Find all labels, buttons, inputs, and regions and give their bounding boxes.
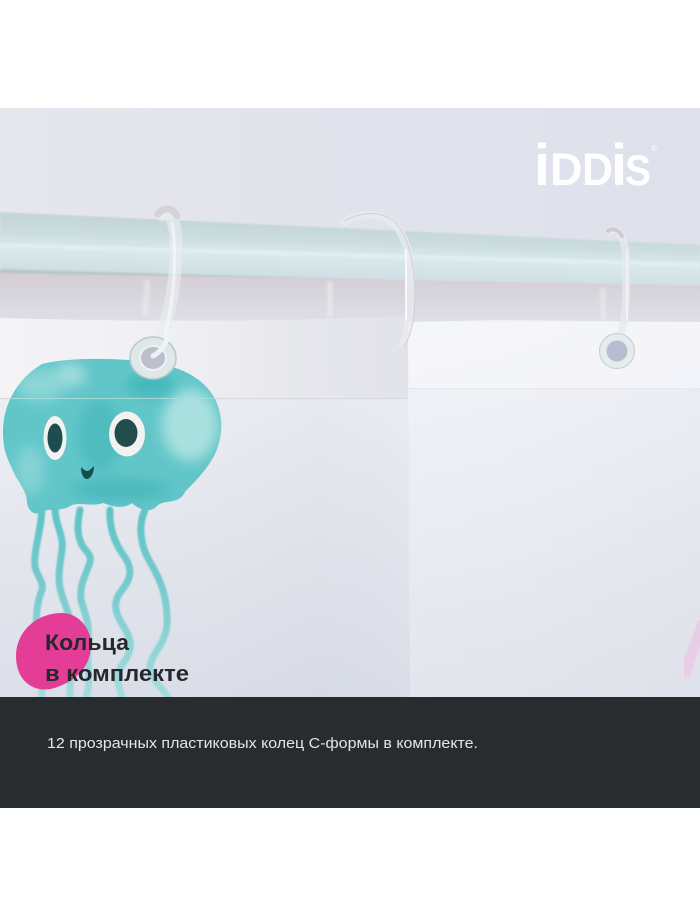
curtain left panel — [0, 316, 410, 697]
caption text: 12 прозрачных пластиковых колец С-формы в комплекте. — [47, 736, 478, 752]
jellyfish tentacles — [35, 505, 168, 697]
logo: IDDIS: i — [611, 133, 627, 198]
dark caption bar — [0, 697, 700, 808]
logo: IDDIS: ® — [651, 144, 657, 153]
ring 3 — [600, 229, 634, 368]
logo: IDDIS: S — [625, 147, 651, 195]
heading: rings included: Кольца — [45, 630, 130, 655]
pink tentacle on right panel — [686, 625, 700, 672]
jellyfish right eye — [109, 412, 145, 456]
ring 1 eyelet — [130, 337, 176, 379]
logo: IDDIS: D — [550, 144, 582, 195]
logo: IDDIS: i — [534, 133, 550, 198]
ring reflections on the band — [145, 280, 603, 320]
jellyfish body — [3, 359, 221, 514]
logo: IDDIS: D — [582, 144, 613, 195]
ring 2 — [344, 214, 415, 347]
mauve band behind curtain — [0, 272, 700, 320]
jellyfish watercolor texture — [0, 363, 225, 502]
pink blob — [16, 613, 91, 689]
jellyfish mouth — [81, 466, 94, 479]
photo: curtain on rod — [0, 108, 700, 697]
jellyfish illustration — [0, 359, 225, 697]
heading: rings included: в комплекте — [45, 661, 189, 686]
logo: IDDIS — [538, 142, 657, 186]
curtain right panel — [408, 320, 700, 566]
heading: rings included — [46, 634, 188, 681]
ring 3 eyelet — [600, 334, 634, 368]
jellyfish left eye — [44, 416, 66, 460]
curtain rod — [0, 212, 700, 285]
ring 1 — [130, 209, 177, 379]
wall background — [0, 108, 700, 285]
